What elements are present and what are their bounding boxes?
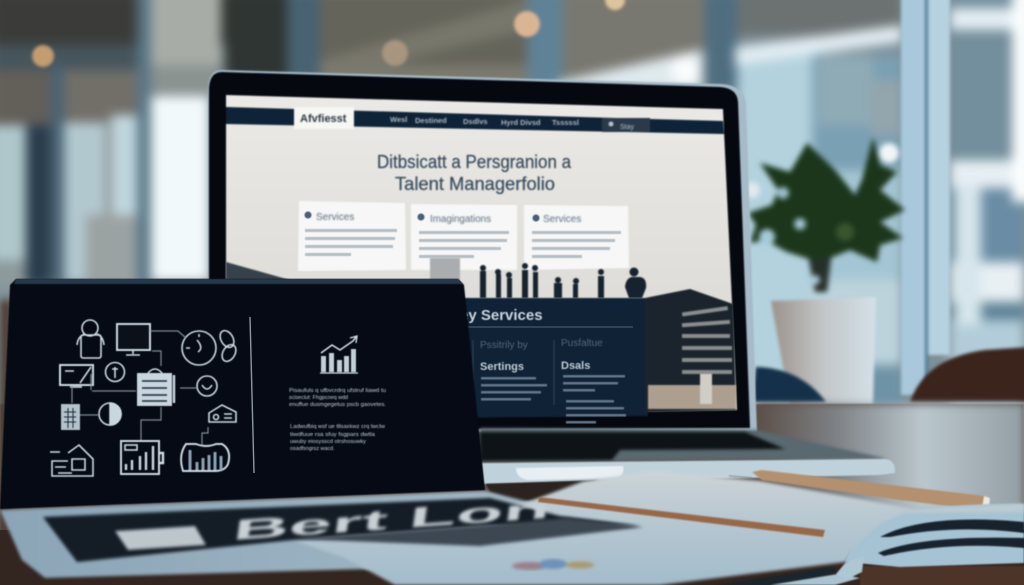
icon: calculator: [61, 404, 80, 430]
notebook front page: [293, 471, 1024, 585]
hero heading: Talent Managerfolio: [395, 174, 555, 194]
key service columns: Pssitrily by: [480, 340, 528, 351]
ceiling lights: [32, 0, 625, 67]
front laptop: [0, 279, 1024, 585]
three service cards: [298, 201, 629, 271]
colour smudge logo: [512, 559, 594, 570]
lid: [208, 70, 757, 432]
icon: smile badge: [197, 376, 217, 396]
key service columns: Pusfaltue: [561, 338, 603, 349]
base: [0, 491, 640, 578]
left side: [0, 0, 230, 45]
icon: monitor: [117, 324, 150, 355]
keyboard deck: [480, 428, 888, 462]
main laptop: [208, 70, 895, 484]
description text: osadfsngrsz wacd.: [290, 446, 335, 452]
icon: info circle: [106, 362, 124, 382]
right side: [737, 0, 902, 35]
icon: house: [50, 445, 93, 476]
card text: [304, 212, 621, 258]
icon: tablet screen: [60, 365, 93, 387]
hero heading: Ditbsicatt a Persgranion a: [377, 152, 572, 172]
keyboard key block: [115, 526, 206, 550]
chair: [910, 347, 1024, 402]
icon: person with phone: [77, 320, 104, 358]
key services heading: ey Services: [460, 307, 543, 324]
key services dark panel: [226, 289, 736, 420]
icon: globe clock: [182, 331, 216, 365]
description text: Pisaufuls q ufbvcrdrq ufstruf liawd tu: [289, 388, 386, 394]
pencil behind page: [729, 470, 990, 510]
big deck lettering: Bert Lon: [231, 492, 553, 546]
key service columns: Dsals: [561, 360, 590, 372]
card text: Services: [543, 214, 581, 225]
connector lines: [72, 331, 208, 445]
desk surface: [0, 300, 1024, 585]
ribbon bookmark: [538, 497, 825, 537]
card text: Imagingations: [430, 214, 491, 225]
web page on screen: Afvfiesst: [300, 113, 347, 125]
hero heading: [377, 152, 572, 194]
web page on screen: Dsdlvs: [463, 117, 488, 126]
icon network: [50, 320, 239, 476]
web page on screen: Destined: [415, 116, 447, 125]
open notebook with pencil: [486, 470, 1024, 567]
icon: growth chart: [320, 336, 358, 373]
notebook lower edge: [716, 556, 864, 585]
bent dark sheet: [293, 518, 643, 546]
dark chair behind laptop: [752, 367, 826, 402]
description text: uwuby eiosysscd otrshosuwky: [290, 439, 366, 445]
description text: enuffue dusmgegetus pscb gaovetes.: [289, 402, 386, 408]
icon: leaves: [217, 328, 239, 364]
icon: half circle: [99, 403, 121, 425]
keyboard panel: [43, 498, 640, 562]
blurred office background: [0, 0, 1024, 410]
description text: Ladwufbiq wsf ue tllsaxkwz crq lwcIw: [290, 424, 385, 430]
window columns: [901, 0, 950, 395]
nav bar: [226, 107, 724, 134]
laptop front edge: [480, 459, 895, 484]
skyline silhouettes with people: [226, 258, 646, 300]
dark table gap under laptop: [486, 480, 600, 502]
web page on screen: Wesl: [390, 115, 407, 124]
page stack edges: [845, 504, 1024, 567]
web page on screen: Stay: [620, 124, 635, 131]
description text: sciseclut: Fhgpcoeq wdd: [289, 395, 348, 401]
building windows: [682, 306, 732, 374]
key service columns: [473, 338, 626, 424]
web page on screen: Tsssssl: [552, 118, 579, 127]
screen: [0, 279, 485, 509]
description text: tiwdfuue rsa sfuy fsgpars dwtla: [290, 432, 375, 438]
web page on screen: Hyrd Divsd: [501, 118, 541, 127]
icon: id card house: [209, 405, 236, 422]
plant in pot: [744, 137, 905, 405]
top centre: [225, 0, 287, 80]
card text: Services: [316, 212, 354, 223]
description text: [289, 388, 386, 452]
icon: cloud bar chart: [181, 444, 229, 471]
divider line: [250, 317, 254, 473]
icon: clipboard: [137, 369, 174, 406]
key service columns: Sertings: [480, 361, 524, 373]
icon: bar chart panel: [121, 441, 163, 474]
web page on screen: [226, 95, 737, 418]
